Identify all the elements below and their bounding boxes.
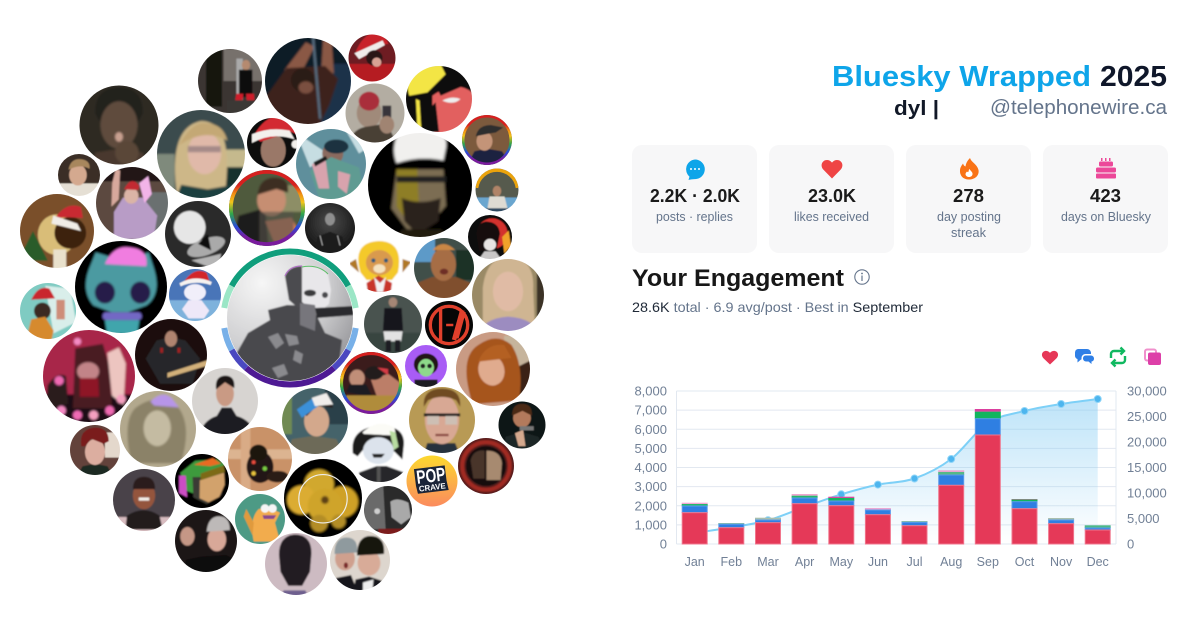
left axis labels: 2,000 [634, 498, 667, 513]
avatar: red-haired woman smiling [449, 325, 537, 413]
cumulative line [695, 399, 1098, 533]
bar: Mar [755, 518, 781, 544]
cumulative markers [691, 396, 1101, 536]
bar: Dec [1085, 525, 1111, 544]
month labels: Apr [795, 555, 814, 569]
avatar: sunflowers on black [276, 451, 370, 545]
right axis labels: 15,000 [1127, 460, 1167, 475]
left axis labels: 7,000 [634, 403, 667, 418]
bar: May [828, 497, 854, 544]
avatar: figure in dark with light jacket lines [305, 203, 355, 253]
avatar: pink emoji collage [43, 330, 135, 422]
panel: stat day posting streak [906, 145, 1031, 253]
avatar: grayscale abstract photo [165, 201, 231, 267]
avatar: black cat with lights on plaid [228, 427, 292, 491]
avatar: teal alien cat on black [75, 241, 167, 333]
avatar: pencil sketch with purple mouse [120, 391, 196, 467]
user name and handle: dyl | [894, 98, 939, 120]
month labels: Jun [868, 555, 888, 569]
avatar: cartoon man in suit with white hair [342, 412, 418, 488]
avatar: man with glasses on gold background [402, 380, 482, 460]
panel: stat days on Bluesky [1043, 145, 1168, 253]
icon: heart [822, 160, 842, 178]
avatar: blonde woman with glasses [157, 110, 245, 198]
month labels: May [829, 555, 854, 569]
right axis labels: 25,000 [1127, 409, 1167, 424]
avatar: bearded man with glasses on black [368, 133, 472, 237]
icon: info [855, 270, 869, 284]
avatar: Pop Crave logo: CRAVE [418, 481, 447, 494]
icon: legend quotes [1145, 350, 1161, 365]
engagement summary text: 28.6K total · 6.9 avg/post · Best in September [632, 299, 923, 315]
avatar: man eating, rainbow ring [229, 170, 305, 246]
avatar: singer holding mic stand [265, 38, 351, 124]
grid lines [676, 391, 1116, 544]
left axis labels: 8,000 [634, 384, 667, 398]
user name and handle [894, 97, 1168, 120]
heading: Your Engagement: Your Engagement [632, 265, 844, 292]
bar: Aug [938, 470, 964, 544]
avatar cluster [13, 29, 551, 601]
panel: stat likes received: likes received [794, 210, 869, 224]
month labels: Feb [721, 555, 742, 569]
avatar: man in cap, rainbow ring [462, 115, 512, 165]
right axis labels: 0 [1127, 536, 1134, 552]
month labels: Jul [907, 555, 922, 569]
avatar: plush with santa hat and tree [20, 194, 94, 268]
avatar: blurred selfie with red beanie [346, 84, 404, 142]
month labels: Mar [757, 555, 779, 569]
avatar: couple, rainbow ring [340, 352, 402, 414]
bar: Jun [865, 508, 891, 544]
avatar: manga figure on red [468, 215, 512, 259]
avatar: blonde cartoon reindeer [350, 240, 410, 292]
left axis labels: 5,000 [634, 441, 667, 456]
left axis labels: 6,000 [634, 422, 667, 437]
avatar: person on teal poster with santa hat [20, 283, 76, 339]
avatar: orange cartoon creature on teal [230, 489, 290, 549]
stacked bars [682, 409, 1111, 544]
avatar: person in red tights [198, 49, 262, 113]
bar: Jan [682, 503, 708, 544]
avatar: person before confetti wall [476, 168, 518, 212]
avatar: comic woman with yellow hat [406, 66, 472, 132]
avatar: grayscale photo [359, 481, 417, 539]
month labels: Dec [1087, 555, 1109, 569]
avatar: red circle band logo [425, 301, 473, 349]
panel: stat day posting streak: streak [951, 226, 987, 240]
avatar: dim portrait with finger on lip [80, 86, 158, 164]
left axis labels: 4,000 [634, 460, 667, 475]
icon: legend repost [1111, 348, 1125, 366]
right axis labels: 10,000 [1127, 486, 1167, 500]
avatar: two men with beanies [324, 524, 396, 598]
panel: stat likes received: 23.0K [808, 186, 856, 206]
left axis labels: 3,000 [634, 479, 667, 494]
title: Bluesky Wrapped 2025: Bluesky Wrapped [832, 61, 1091, 93]
panel: stat likes received [769, 145, 894, 253]
avatar: smiling man with white cap [282, 388, 348, 454]
avatar: dark dog face on mauve [259, 527, 333, 601]
chart: monthly engagement stacked bars with cumulative line [634, 384, 1167, 569]
right axis labels [1127, 384, 1167, 552]
avatar: blonde woman lilac sweater [472, 259, 544, 331]
avatar: figure in black by bare trees [364, 295, 422, 353]
avatar: shirtless man pout [414, 238, 474, 298]
left axis labels: 1,000 [634, 517, 667, 532]
icon: birthday cake [1096, 158, 1116, 178]
month labels [685, 555, 1109, 569]
bar: Feb [718, 523, 744, 544]
avatar: Pop Crave logo [405, 455, 460, 507]
right axis labels: 30,000 [1127, 384, 1167, 398]
left axis labels [634, 384, 667, 552]
avatar: red-haired young man [70, 425, 120, 475]
bar: Jul [902, 521, 928, 544]
bar: Apr [792, 494, 818, 544]
avatar: singer in pastel shirt with santa hat [96, 167, 168, 239]
avatar: santa hat man [247, 118, 297, 168]
icon: chat bubble [686, 160, 705, 180]
left axis labels: 0 [660, 536, 667, 552]
panel: stat day posting streak: day posting [937, 210, 1001, 224]
month labels: Aug [940, 555, 962, 569]
icon: flame [960, 158, 979, 180]
panel: stat day posting streak: 278 [953, 186, 984, 206]
panel: stat days on Bluesky: days on Bluesky [1061, 210, 1152, 224]
title: Bluesky Wrapped 2025: 2025 [1100, 61, 1167, 93]
right axis labels: 20,000 [1127, 434, 1167, 450]
month labels: Oct [1015, 555, 1035, 569]
avatar: man rock sign [494, 397, 550, 453]
bar: Sep [975, 409, 1001, 544]
panel: stat posts and replies: 2.2K · 2.0K [650, 186, 740, 206]
avatar: singer on icy blue background [296, 129, 366, 199]
avatar: man with bass in dark room [135, 319, 207, 391]
avatar: white lamb on blue with santa hat [169, 269, 221, 321]
avatar: red circular badge with face [452, 432, 520, 500]
month labels: Nov [1050, 555, 1073, 569]
icon: legend replies [1075, 349, 1094, 364]
right axis labels: 5,000 [1127, 511, 1160, 526]
bar: Oct [1012, 499, 1038, 544]
chart legend icons [1042, 348, 1161, 366]
month labels: Jan [685, 555, 705, 569]
avatar: man with short hair, white top [58, 154, 100, 196]
avatar: man in black zip jacket [192, 368, 258, 434]
avatar: minecraft rainbow head [175, 454, 229, 508]
panel: stat posts and replies [632, 145, 757, 253]
avatar: laughing man with dark scarf [113, 469, 175, 531]
avatar: Pop Crave logo: POP [415, 464, 447, 489]
month labels: Sep [977, 555, 999, 569]
cumulative area fill [695, 399, 1098, 544]
avatar: santa hat on red [348, 34, 396, 82]
avatar: man waving with beanie [169, 504, 243, 578]
avatar: main profile, skull mask with ring [220, 248, 360, 388]
user name and handle: @telephonewire.ca [990, 97, 1168, 119]
panel: stat posts and replies: posts · replies [656, 210, 733, 224]
bar: Nov [1048, 518, 1074, 544]
icon: legend heart [1042, 351, 1058, 364]
avatar: green bug girl on purple [405, 345, 447, 387]
panel: stat days on Bluesky: 423 [1090, 186, 1121, 206]
